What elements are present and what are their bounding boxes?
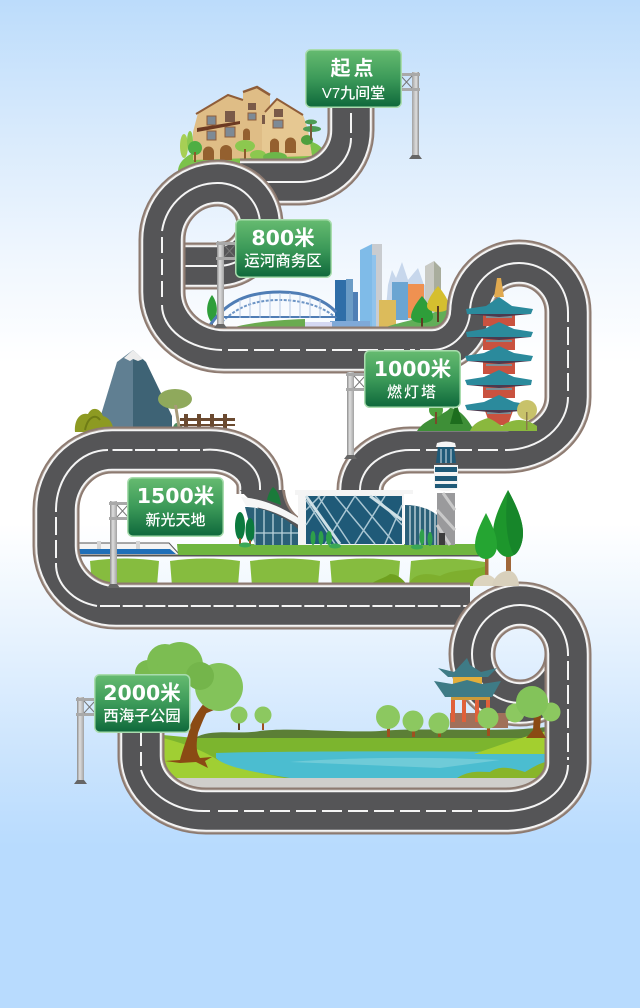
sign: 1500m: 1500米 bbox=[137, 484, 215, 508]
sign: 2000m bbox=[95, 675, 190, 732]
pole: start gantry bbox=[400, 72, 422, 159]
sign: 1500m bbox=[128, 478, 223, 536]
scene: mountain with bush and fence bbox=[75, 350, 235, 432]
sign: start bbox=[306, 50, 401, 107]
road: loop back section bbox=[176, 183, 260, 266]
sign: 800m bbox=[236, 220, 331, 277]
sign: 1000m: 1000米 bbox=[374, 357, 452, 381]
sign: 800m: 800米 bbox=[251, 226, 315, 250]
sign: 1000m bbox=[365, 351, 460, 407]
scene: tall cypress trees and rocks bbox=[473, 490, 523, 586]
pole: 2000m gantry bbox=[74, 697, 96, 784]
road: 2000m section bbox=[141, 605, 568, 811]
sign: 800m: 运河商务区 bbox=[244, 252, 322, 270]
road: 800m to 1000m section bbox=[162, 183, 568, 494]
pole: 1500m gantry bbox=[107, 501, 129, 588]
road: start segment bbox=[240, 100, 351, 182]
scene: villa at start bbox=[178, 87, 324, 172]
sign: 1500m: 新光天地 bbox=[145, 512, 206, 529]
scene: city skyline and bridge bbox=[207, 244, 455, 331]
scene: terminal building and tower bbox=[235, 442, 458, 550]
pole: 800m gantry bbox=[214, 241, 236, 328]
sign: start: V7九间堂 bbox=[322, 85, 385, 102]
scene: park lawn and lake bbox=[163, 727, 547, 793]
sign: 1000m: 燃灯塔 bbox=[387, 383, 438, 401]
sign: start: 起点 bbox=[330, 57, 376, 80]
pole: 1000m gantry bbox=[344, 372, 366, 459]
road: final lower ring bbox=[472, 654, 568, 703]
road: 1500m section bbox=[56, 450, 470, 606]
sign: 2000m: 2000米 bbox=[103, 681, 181, 705]
scene: park trees and pavilion bbox=[135, 642, 560, 768]
scene: viaduct deck, train and green panels bbox=[78, 541, 486, 586]
scene: red pagoda with trees bbox=[417, 278, 537, 431]
sign: 2000m: 西海子公园 bbox=[103, 707, 181, 725]
